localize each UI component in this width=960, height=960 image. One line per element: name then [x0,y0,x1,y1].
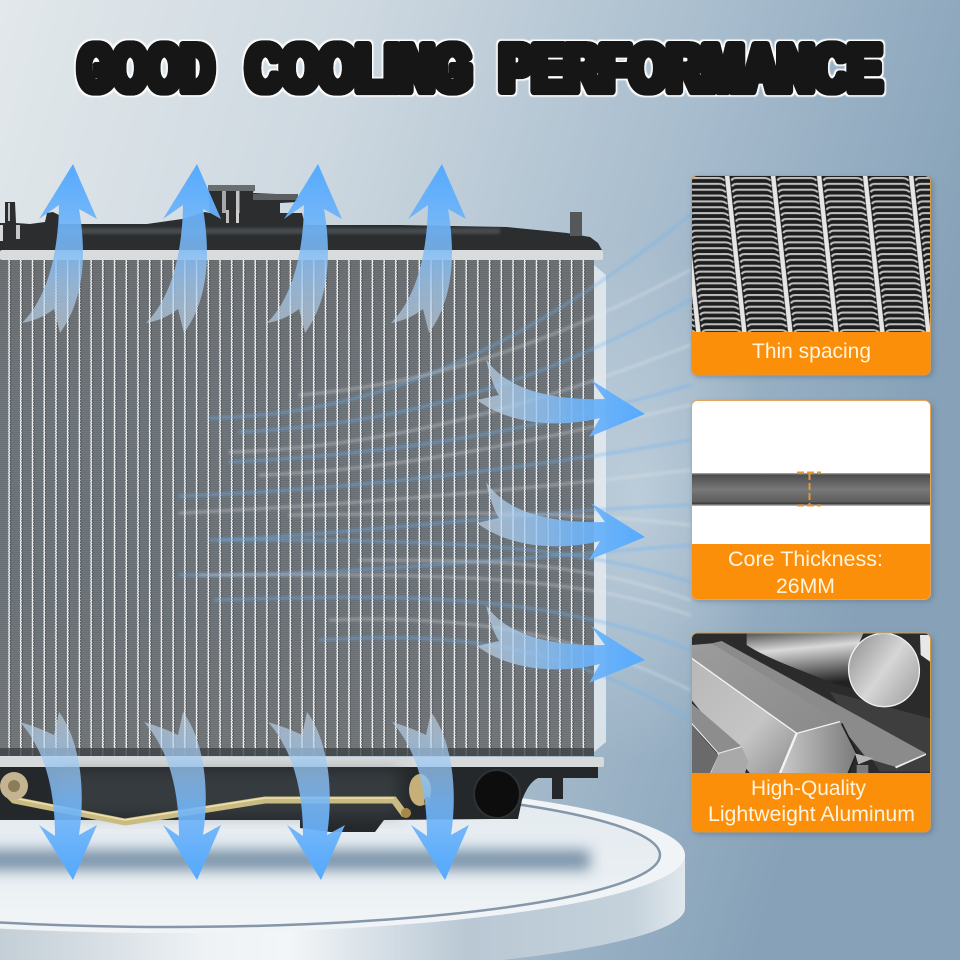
caption: aluminum: High-Quality [751,777,866,800]
title: COOLING [247,32,471,104]
photo: core tube side view [691,473,931,506]
photo: aluminum bars [690,629,933,775]
arrows: upward airflow [22,164,466,333]
side plate [594,265,606,752]
caption bar [691,544,931,600]
panel: aluminum [690,629,933,834]
top tank [0,185,603,252]
title [79,32,881,104]
bottom rail [0,757,604,767]
radiator [0,185,690,832]
bottom tank [0,767,598,832]
caption: thin spacing: Thin spacing [752,340,871,363]
caption: core thickness: Core Thickness: [728,548,883,571]
radiator core [0,259,594,756]
caption: aluminum: Lightweight Aluminum [708,803,915,826]
title: GOOD [79,32,213,104]
panel: core thickness [691,400,933,601]
arrows: rightward airflow [477,359,645,683]
thickness marker [797,472,821,506]
caption bar [691,332,931,376]
arrows: downward airflow [20,712,469,880]
water outlet [474,770,520,818]
top rail [0,250,603,260]
panel: thin spacing [691,175,933,377]
air flow streaks [180,215,690,720]
caption: core thickness: 26MM [776,575,835,598]
caption bar [691,773,931,833]
brass pipe [6,790,405,822]
platform [0,777,685,960]
photo: fin close-up [691,175,931,332]
